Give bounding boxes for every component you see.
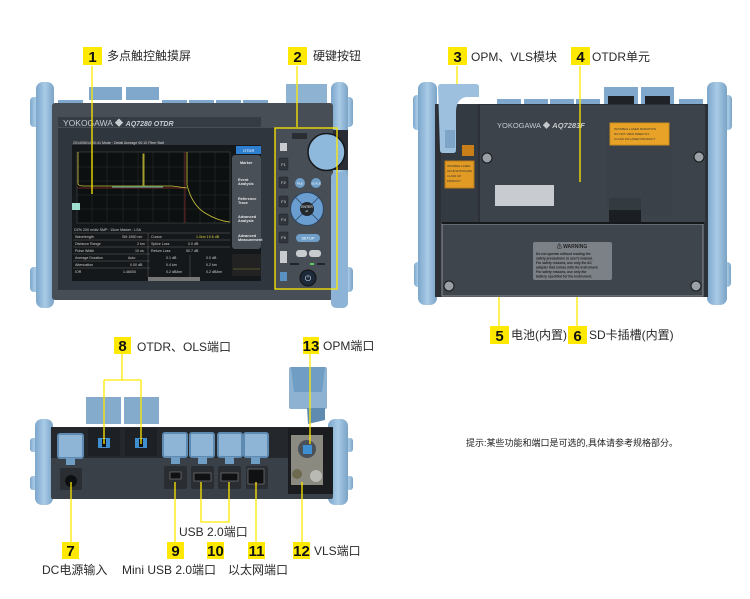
- trace: [77, 152, 185, 223]
- settings table: Auto: [128, 256, 135, 260]
- soft key menu: Marker: [240, 161, 253, 165]
- OPM and VLS panel: [288, 428, 333, 494]
- settings table: Average Duration: [75, 256, 103, 260]
- callout 11: 以太网端口: 11: [249, 543, 264, 560]
- callout 5: 电池(内置): [490, 326, 567, 345]
- settings table: Attenuation: [75, 263, 93, 267]
- top covers: [497, 87, 703, 104]
- warning label: safety precautions in user's manual.: [536, 256, 593, 260]
- power jack: [60, 468, 82, 490]
- hard keys: ENTER: [301, 205, 313, 209]
- settings table: Splice Loss: [151, 242, 170, 246]
- soft key menu: Event: [238, 178, 249, 182]
- soft key menu: Analysis: [238, 219, 254, 223]
- bottom view of device: [30, 367, 353, 505]
- settings table: 0.1 dB: [166, 256, 177, 260]
- power button: [300, 270, 316, 286]
- callout 11: 以太网端口: 以太网端口: [228, 562, 288, 577]
- callout 8: OTDR、OLS端口: 8: [118, 338, 127, 355]
- callout 2: 硬键按钮: [288, 47, 361, 66]
- opened covers: [86, 397, 159, 424]
- settings table: 0.2 km: [206, 263, 217, 267]
- callout 4: OTDR单元: 4: [576, 49, 585, 66]
- orange laser label: CLASS 1M LASER PRODUCT: [614, 137, 655, 141]
- callout 13: OPM端口: 13: [303, 338, 319, 355]
- settings table: 50.7 dB: [186, 249, 199, 253]
- fibre ports: [88, 428, 157, 456]
- settings table: Wavelength: [75, 235, 94, 239]
- screen: 2014/06/14 00:41 Mode : Detail Average 00:10 Fiber Batt: [73, 141, 164, 145]
- menu tab: [236, 146, 261, 154]
- callout 12: VLS端口: VLS端口: [314, 544, 361, 558]
- warning label: For safety reasons, use only the: [536, 270, 587, 274]
- screen: [72, 133, 345, 286]
- hard keys: ⏻: [305, 274, 312, 283]
- model label: YOKOGAWA ◆ AQ7283F: [497, 121, 585, 130]
- battery cover: [442, 224, 703, 296]
- hard keys: F5: [281, 235, 287, 240]
- settings table: DZ% 200 m/div SMP : 10cm Marker : LSA: [74, 228, 142, 232]
- hard keys: F1: [281, 162, 287, 167]
- soft key menu: Advanced: [238, 234, 257, 238]
- callout 7: DC电源输入: [42, 542, 107, 577]
- settings table: 0.2 dB/km: [206, 270, 222, 274]
- body: [51, 427, 333, 499]
- top connector covers: [58, 84, 327, 104]
- settings table: Pulse Width: [75, 249, 94, 253]
- body: [52, 103, 333, 300]
- settings table: 0.00 dB: [130, 263, 143, 267]
- module panel (OPM, VLS): [438, 84, 479, 188]
- brand label: YOKOGAWA ◆ AQ7280 OTDR: [63, 118, 174, 128]
- callout 2: 硬键按钮: 硬键按钮: [313, 48, 361, 63]
- screen side tab: [72, 203, 80, 210]
- settings table: 0.0 dB: [206, 256, 217, 260]
- side bumpers: [30, 82, 353, 308]
- warning label: ⚠ WARNING: [557, 244, 587, 250]
- callout 6: SD卡插槽(内置): [568, 326, 674, 345]
- note text: 提示:某些功能和端口是可选的,具体请参考规格部分。: [466, 437, 678, 448]
- callout 12: VLS端口: [293, 542, 361, 560]
- leader lines: [71, 66, 580, 542]
- warning label: [533, 242, 612, 280]
- settings table: 0.0 dB: [188, 242, 199, 246]
- settings table: 10 ns: [135, 249, 144, 253]
- callout 9: Mini USB 2.0端口: [122, 542, 216, 577]
- settings table: [73, 228, 261, 281]
- callout 9: Mini USB 2.0端口: 9: [171, 543, 180, 560]
- rating plate: [495, 185, 554, 206]
- orange laser label: [610, 123, 669, 145]
- callout 4: OTDR单元: OTDR单元: [592, 50, 650, 64]
- module panel (OPM, VLS): AVOID EXPOSURE: [447, 169, 472, 173]
- callout 8: OTDR、OLS端口: OTDR、OLS端口: [137, 340, 231, 354]
- callout 2: 硬键按钮: 2: [293, 49, 302, 66]
- module panel (OPM, VLS): INVISIBLE LASER: [447, 164, 470, 168]
- hard keys: ↵: [305, 208, 309, 214]
- settings table: Return Loss: [151, 249, 171, 253]
- callout 11: 以太网端口: [228, 542, 288, 577]
- callout 12: VLS端口: 12: [293, 543, 310, 560]
- hard keys: FILE: [297, 182, 303, 186]
- settings table: 1.0km 19.6 dB: [196, 235, 220, 239]
- warning label: Do not operate without reading the: [536, 252, 591, 256]
- callout 6: SD卡插槽(内置): 6: [573, 328, 582, 345]
- hard keys: F3: [281, 199, 287, 204]
- callout 1: 多点触控触摸屏: [83, 47, 191, 66]
- hard keys: SCALE: [311, 182, 321, 186]
- warning label: battery specified for the instrument.: [536, 274, 592, 278]
- callout 10: USB 2.0端口: 10: [207, 543, 224, 560]
- hard keys: [279, 133, 345, 286]
- screen: OTDR: [243, 148, 254, 153]
- callout 6: SD卡插槽(内置): SD卡插槽(内置): [589, 328, 674, 342]
- settings table: 2 km: [137, 242, 145, 246]
- soft key menu: Trace: [238, 201, 248, 205]
- callout 4: OTDR单元: [571, 47, 650, 66]
- recessed panel: [607, 121, 672, 215]
- module panel (OPM, VLS): PRODUCT: [447, 179, 461, 183]
- warning label: adapter that comes with the instrument.: [536, 266, 599, 270]
- soft key menu: Analysis: [238, 182, 254, 186]
- hard keys: SETUP: [301, 236, 315, 240]
- hard keys: F2: [281, 180, 287, 185]
- callout 1: 多点触控触摸屏: 1: [88, 49, 97, 66]
- soft key menu: Advanced: [238, 215, 257, 219]
- callout 1: 多点触控触摸屏: 多点触控触摸屏: [107, 49, 191, 63]
- callout 13: OPM端口: [303, 337, 374, 355]
- callout 3: OPM、VLS模块: 3: [453, 49, 462, 66]
- callout 7: DC电源输入: DC电源输入: [42, 562, 107, 577]
- orange laser label: INVISIBLE LASER RADIATION: [614, 127, 656, 131]
- callout 9: Mini USB 2.0端口: Mini USB 2.0端口: [122, 563, 216, 577]
- body: [435, 104, 708, 297]
- rotary knob: [308, 134, 345, 170]
- soft key menu: [232, 155, 263, 249]
- callout 10: USB 2.0端口: USB 2.0端口: [179, 525, 248, 539]
- soft key menu: Measurement: [238, 238, 263, 242]
- settings table: 1.46000: [123, 270, 136, 274]
- orange laser label: DO NOT VIEW DIRECTLY: [614, 132, 650, 136]
- callout 7: DC电源输入: 7: [66, 543, 75, 560]
- module panel (OPM, VLS): CLASS 1M: [447, 174, 462, 178]
- callout 10: USB 2.0端口: [179, 525, 248, 560]
- arrow pad: [290, 192, 324, 226]
- callout 3: OPM、VLS模块: [448, 47, 557, 66]
- callout 8: OTDR、OLS端口: [114, 337, 231, 355]
- callout 5: 电池(内置): 5: [495, 328, 504, 345]
- bumpers: [30, 419, 353, 505]
- settings table: Distance Range: [75, 242, 101, 246]
- bumpers: [413, 82, 732, 305]
- hard keys: F4: [281, 217, 287, 222]
- settings table: 0.4 km: [166, 263, 177, 267]
- callout 3: OPM、VLS模块: OPM、VLS模块: [471, 50, 557, 64]
- screws: [444, 152, 704, 291]
- callout 5: 电池(内置): 电池(内置): [511, 328, 567, 342]
- settings table: 0.2 dB/km: [166, 270, 182, 274]
- back view of device: [413, 82, 732, 305]
- settings table: SM 1550 nm: [122, 235, 142, 239]
- callout 13: OPM端口: OPM端口: [323, 339, 374, 353]
- port covers: [58, 433, 268, 458]
- settings table: IOR: [75, 270, 82, 274]
- soft key menu: Reference: [238, 197, 256, 201]
- data ports: [164, 466, 268, 489]
- warning label: For safety reasons, use only the AC: [536, 261, 593, 265]
- settings table: Cursor: [151, 235, 163, 239]
- setup button: [296, 234, 320, 242]
